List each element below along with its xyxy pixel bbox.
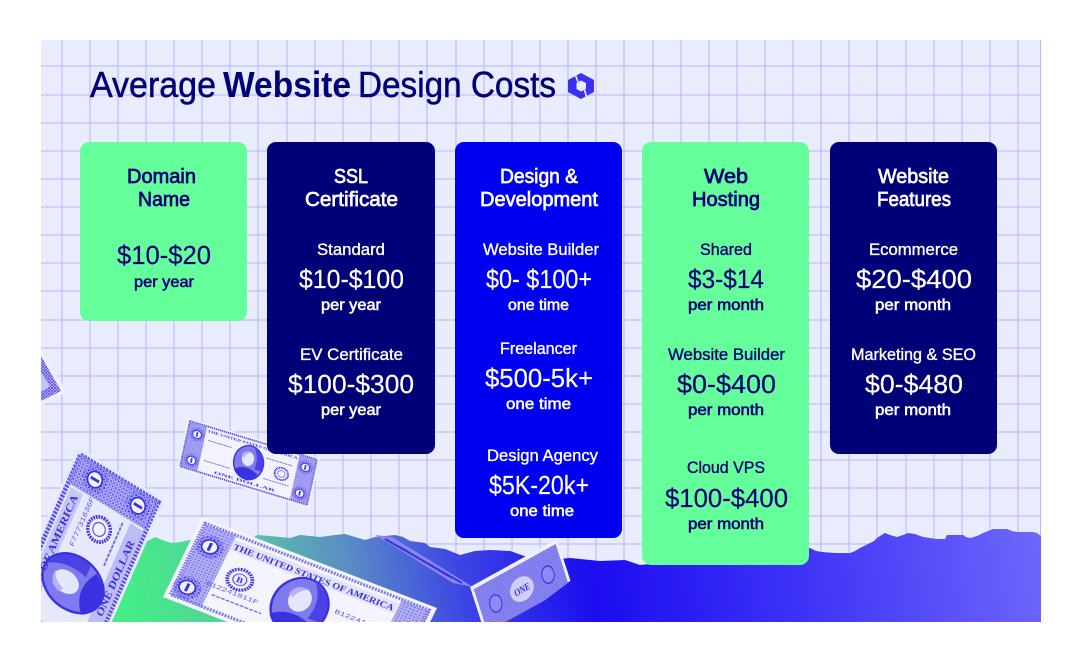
icon: hexagon logo bbox=[568, 73, 594, 99]
bill: large bottom bbox=[163, 517, 437, 622]
tier: ev certificate: EV Certificate bbox=[300, 346, 403, 364]
tier: website builder bbox=[668, 346, 785, 419]
tier: cloud vps: $100-$400 bbox=[665, 483, 788, 513]
tier: cloud vps: Cloud VPS bbox=[687, 459, 765, 477]
tier: standard: per year bbox=[321, 297, 381, 314]
bill: large bottom: B12241811F bbox=[333, 609, 388, 635]
panel: website features bbox=[830, 142, 997, 454]
tier: ev certificate bbox=[288, 346, 414, 419]
tier: marketing and seo: $0-$480 bbox=[865, 369, 963, 399]
panel: ssl certificate bbox=[267, 142, 435, 454]
heading bbox=[127, 166, 196, 211]
tier: standard bbox=[299, 241, 404, 314]
heading: Hosting bbox=[692, 189, 760, 211]
tier: standard: Standard bbox=[317, 241, 385, 259]
panel: web hosting bbox=[642, 142, 809, 565]
tier: design agency: one time bbox=[510, 503, 574, 520]
heading: Name bbox=[138, 189, 190, 211]
heading: Development bbox=[480, 189, 598, 211]
tier: marketing and seo bbox=[851, 346, 976, 419]
tier: design agency: Design Agency bbox=[487, 447, 599, 465]
tier: marketing and seo: per month bbox=[875, 402, 951, 419]
bill: cut off at left edge bbox=[41, 356, 62, 404]
dollar bills bbox=[41, 356, 570, 622]
tier: design agency: $5K-20k+ bbox=[489, 470, 589, 500]
tier: cloud vps bbox=[665, 459, 788, 533]
tier: website builder: $0- $100+ bbox=[486, 264, 592, 294]
heading: Features bbox=[877, 189, 951, 211]
bill: large left bbox=[41, 452, 162, 622]
tier: freelancer: one time bbox=[506, 396, 571, 413]
tier: ecommerce: $20-$400 bbox=[856, 264, 972, 294]
price unit: per year bbox=[134, 274, 194, 291]
tier: shared bbox=[688, 241, 764, 314]
title: Design Costs bbox=[358, 64, 556, 105]
title: Average bbox=[90, 64, 216, 105]
tier: website builder: per month bbox=[688, 402, 764, 419]
tier: website builder: $0-$400 bbox=[677, 369, 776, 399]
tier: marketing and seo: Marketing & SEO bbox=[851, 346, 976, 364]
heading bbox=[305, 166, 398, 211]
bill: small tilted: ONE DOLLAR bbox=[214, 470, 277, 493]
heading bbox=[480, 166, 598, 211]
tier: cloud vps: per month bbox=[688, 516, 764, 533]
heading: Certificate bbox=[305, 189, 398, 211]
heading: Website bbox=[878, 166, 949, 188]
bill: small tilted bbox=[177, 418, 320, 508]
heading: Web bbox=[704, 166, 748, 188]
tier: shared: Shared bbox=[700, 241, 752, 259]
title bbox=[90, 64, 556, 105]
bill: large bottom: B12241811F bbox=[204, 580, 259, 607]
heading bbox=[877, 166, 951, 211]
heading bbox=[692, 166, 760, 211]
torn paper gradient band bbox=[41, 529, 1041, 622]
tier: website builder: Website Builder bbox=[483, 241, 599, 259]
price: $10-$20 bbox=[117, 240, 211, 270]
tier: ev certificate: $100-$300 bbox=[288, 369, 414, 399]
tier: website builder: Website Builder bbox=[668, 346, 785, 364]
tier: website builder bbox=[483, 241, 599, 314]
bill: small tilted: THE UNITED STATES OF AMERICA bbox=[207, 429, 298, 460]
tier: shared: $3-$14 bbox=[688, 264, 764, 294]
tier: shared: per month bbox=[688, 297, 764, 314]
heading: SSL bbox=[334, 166, 368, 188]
tier: website builder: one time bbox=[508, 297, 569, 314]
bill: bent small, reverse side: ONE bbox=[513, 581, 532, 600]
bill: bent small, reverse side bbox=[470, 544, 570, 622]
heading: Domain bbox=[127, 166, 196, 188]
tier: ecommerce bbox=[856, 241, 972, 314]
heading: Design & bbox=[500, 166, 579, 188]
bill: large bottom: THE UNITED STATES OF AMERICA bbox=[231, 542, 396, 614]
tier: standard: $10-$100 bbox=[299, 264, 404, 294]
panel: design and development bbox=[455, 142, 622, 538]
tier: freelancer: Freelancer bbox=[500, 340, 577, 358]
tier: design agency bbox=[487, 447, 599, 520]
tier: ev certificate: per year bbox=[321, 402, 381, 419]
panel: domain name bbox=[80, 142, 247, 321]
title: Website bbox=[223, 64, 351, 105]
tier: freelancer bbox=[485, 340, 593, 413]
bill: large left: F77731636F bbox=[69, 496, 97, 549]
bill: large bottom: B bbox=[234, 576, 244, 586]
bill: folded thin bbox=[375, 535, 473, 587]
bill: large left: ONE DOLLAR bbox=[94, 538, 137, 619]
tier: freelancer: $500-5k+ bbox=[485, 363, 593, 393]
tier: ecommerce: Ecommerce bbox=[869, 241, 958, 259]
bill: large left: STATES OF AMERICA bbox=[18, 492, 81, 620]
tier: ecommerce: per month bbox=[875, 297, 951, 314]
